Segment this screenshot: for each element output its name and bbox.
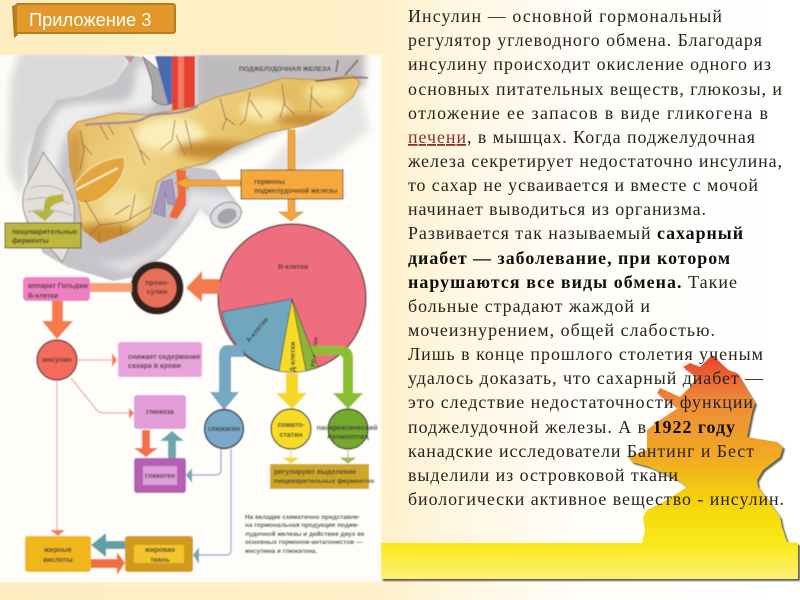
- box: fatty acids: [25, 536, 91, 572]
- body text: Инсулин — основной гормональный: [408, 6, 722, 26]
- body text: канадские исследователи Бантинг и Бест: [408, 441, 754, 461]
- body text: диабет — заболевание, при котором: [408, 248, 730, 268]
- body text: железа секретирует недостаточно инсулина,: [407, 151, 782, 171]
- somatostatin circle: сомато-: [278, 422, 305, 429]
- box: regulate digestive enzymes: пищеварительных ферментов: [274, 478, 374, 485]
- box: digestive enzymes: ферменты: [12, 238, 49, 245]
- body text: отложение ее запасов в виде гликогена в: [408, 103, 768, 123]
- glucagon arrow from pie: [210, 345, 245, 410]
- body text: регулятор углеводного обмена. Благодаря: [408, 30, 762, 50]
- somatostatin arrow: [276, 373, 307, 409]
- somatostatin circle: [271, 409, 311, 449]
- caption: основных гормонов-антагонистов —: [245, 539, 363, 546]
- thin arrows from insulin: [57, 360, 130, 530]
- caption: инсулина и глюкагона.: [245, 548, 317, 555]
- box: fatty acids: кислоты: [43, 557, 73, 564]
- box: glycogen: [134, 458, 186, 493]
- pie chart: islet cells: [218, 224, 366, 372]
- box: pancreas hormones: поджелудочной железы: [254, 187, 338, 195]
- arrows from pancreas to hormones box: [175, 130, 303, 221]
- body text: больные страдают жаждой и: [408, 296, 650, 316]
- body text: биологически активное вещество - инсулин.: [408, 489, 784, 509]
- arrow: pie to proinsulin: [186, 271, 220, 302]
- somatostatin circle: статин: [279, 432, 303, 439]
- caption: На вкладке схематично представле-: [245, 514, 360, 521]
- body text: это следствие недостаточности функции: [408, 392, 753, 412]
- insulin circle: [37, 340, 77, 380]
- proinsulin circle: проин-: [145, 280, 169, 287]
- body text: [407, 6, 784, 509]
- background shading behind organs: [8, 50, 370, 200]
- box: Golgi apparatus: В-клетки: [28, 293, 58, 300]
- ribbon heading: [12, 4, 175, 38]
- box: Golgi apparatus: [23, 277, 90, 301]
- caption: на гормональная продукция подже-: [245, 522, 359, 529]
- glucagon circle: [204, 410, 244, 448]
- box: regulate digestive enzymes: [270, 464, 374, 489]
- box: lowers blood sugar: сахара в крови: [128, 363, 181, 370]
- gallbladder section: [23, 152, 74, 262]
- body text: основных питательных веществ, глюкозы, и: [408, 79, 782, 99]
- body text: начинает выводиться из организма.: [408, 199, 706, 219]
- silhouette figure with yellow bar: [381, 355, 798, 579]
- polypeptide circle: полипептид: [327, 434, 369, 441]
- pancreas: [67, 60, 368, 247]
- polypeptide circle: панкреатический: [316, 423, 378, 432]
- arrow: Golgi to insulin: [42, 301, 73, 339]
- polypeptide circle: [316, 409, 378, 449]
- box: pancreas hormones: гормоны: [254, 179, 285, 186]
- connector: proinsulin to Golgi: [88, 283, 132, 292]
- pie chart: islet cells: В-клетки: [278, 264, 308, 271]
- aorta and vessels: [124, 56, 195, 219]
- insulin circle: инсулин: [42, 357, 72, 364]
- body text: инсулину происходит окисление одного из: [408, 54, 771, 74]
- small arrows to regulation box: [284, 449, 298, 463]
- box: adipose tissue: ткань: [150, 557, 170, 564]
- body text: печени, в мышцах. Когда поджелудочная: [408, 127, 755, 147]
- duodenum: [26, 56, 246, 281]
- polypeptide arrow: [310, 346, 363, 409]
- box: pancreas hormones: [241, 170, 343, 199]
- arrows between glucose and glycogen: [134, 430, 158, 457]
- box: adipose tissue: [125, 536, 193, 572]
- box: lowers blood sugar: [118, 342, 202, 377]
- box: regulate digestive enzymes: регулируют выделение: [274, 469, 356, 476]
- body text: то сахар не усваивается и вместе с мочой: [408, 175, 758, 195]
- pie chart: islet cells: РР-клетки: [311, 337, 320, 367]
- pie chart: islet cells: А-клетки: [245, 317, 270, 344]
- arrows between fatty acids and adipose tissue: [91, 533, 125, 557]
- box: glucose: [134, 395, 186, 429]
- ribbon heading: Приложение 3: [29, 9, 151, 30]
- box: digestive enzymes: [5, 223, 81, 248]
- box: fatty acids: жирные: [43, 547, 72, 554]
- caption: [245, 514, 365, 555]
- box: Golgi apparatus: аппарат Гольджи: [28, 283, 88, 290]
- body text: Лишь в конце прошлого столетия ученым: [408, 344, 763, 364]
- box: lowers blood sugar: снижает содержание: [128, 354, 201, 361]
- box: glucose: глюкоза: [146, 409, 174, 416]
- caption: лудочной железы и действие двух ее: [245, 530, 365, 538]
- panel: pancreas hormone diagram: [0, 50, 381, 582]
- body text: мочеизнурением, общей слабостью.: [408, 320, 715, 340]
- proinsulin circle: [134, 265, 180, 311]
- glucagon circle: глюкагон: [208, 426, 240, 433]
- glucagon thin arrows: [192, 449, 231, 555]
- body text: выделили из островковой ткани: [408, 465, 678, 485]
- body text: удалось доказать, что сахарный диабет —: [408, 368, 764, 388]
- body text: Развивается так называемый сахарный: [408, 223, 743, 243]
- body text: поджелудочной железы. А в 1922 году: [408, 417, 735, 437]
- pie chart: islet cells: Д-клетки: [290, 342, 297, 372]
- box: digestive enzymes: пищеварительные: [12, 229, 77, 236]
- proinsulin circle: сулин: [147, 289, 167, 296]
- label: pancreas: ПОДЖЕЛУДОЧНАЯ ЖЕЛЕЗА: [239, 66, 331, 73]
- box: adipose tissue: жировая: [144, 547, 175, 554]
- box: glycogen: гликоген: [145, 473, 175, 480]
- body text: нарушаются все виды обмена. Такие: [408, 272, 737, 292]
